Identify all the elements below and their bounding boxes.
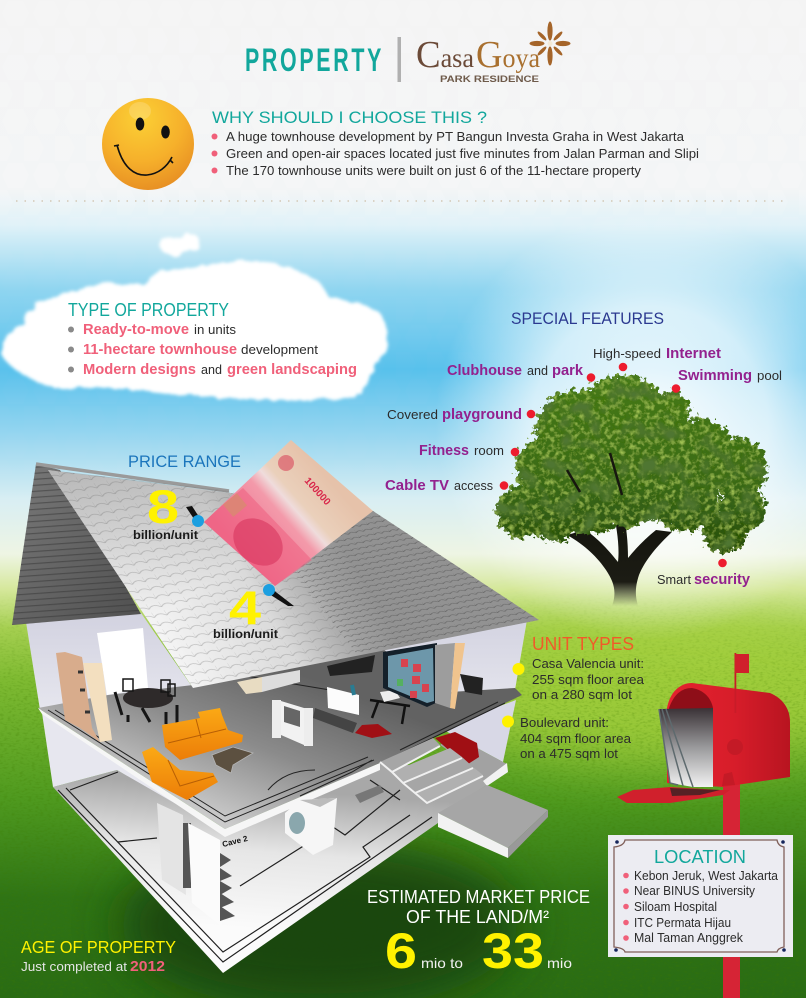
text block: type of property <box>68 300 357 378</box>
label: clubhouse and park: park <box>552 363 584 379</box>
header logo: Property | Casa Goya Park Residence: PROPERTY <box>245 42 384 78</box>
label: clubhouse and park: Clubhouse <box>447 363 522 379</box>
value: 8 billion per unit: billion/unit <box>133 530 198 542</box>
text block: type of property: Modern designs <box>83 361 196 378</box>
text block: type of property: green landscaping <box>227 361 357 378</box>
roof gable left <box>12 464 229 625</box>
text block: type of property: TYPE OF PROPERTY <box>68 300 229 320</box>
door opening <box>97 628 148 695</box>
roof tiles <box>48 470 539 688</box>
panel: unit types: UNIT TYPES <box>532 634 634 654</box>
label: cable tv access <box>385 478 508 494</box>
value: 4 billion per unit <box>213 581 278 641</box>
label: clubhouse and park <box>447 363 595 382</box>
tree foliage <box>496 375 768 553</box>
panel: unit types <box>502 634 645 761</box>
label: covered playground <box>387 407 535 423</box>
label: covered playground: playground <box>442 407 522 423</box>
panel: age of property: AGE OF PROPERTY <box>21 937 176 957</box>
cabinet panel <box>435 643 465 709</box>
label: covered playground: Covered <box>387 407 438 422</box>
connector: 4 billion <box>263 584 294 606</box>
icon: smiley face <box>102 98 194 190</box>
panel: unit types: Casa Valencia unit: <box>532 656 644 671</box>
text block: why should I choose this: WHY SHOULD I CHOOSE THIS ? <box>212 108 487 127</box>
panel: location sign: Siloam Hospital <box>634 899 717 914</box>
dining table and chairs <box>115 679 177 724</box>
panel: location sign: LOCATION <box>654 847 746 867</box>
text block: special features <box>385 309 782 588</box>
orange sofa front <box>142 747 218 800</box>
small red chair <box>355 724 392 738</box>
tree illustration <box>496 375 768 606</box>
panel: unit types: 255 sqm floor area <box>532 672 645 687</box>
text block: type of property: in units <box>194 322 236 337</box>
text block: type of property: and <box>201 362 222 377</box>
icon: logo ornament <box>530 22 570 66</box>
lower left wall <box>42 713 190 812</box>
panel: estimated market price: 33 <box>482 923 544 979</box>
icon: banknote: 100000 <box>302 476 333 508</box>
house cutaway illustration <box>12 464 548 973</box>
icon: banknote <box>204 440 373 586</box>
panel: price range: PRICE RANGE <box>128 452 241 471</box>
panel: unit types: on a 280 sqm lot <box>532 687 632 702</box>
text block: type of property: development <box>241 342 318 357</box>
header logo: Property | Casa Goya Park Residence <box>245 22 570 85</box>
slab edge right <box>483 763 508 786</box>
stairs <box>380 738 483 803</box>
panel: estimated market price: ESTIMATED MARKET PRICE <box>367 887 590 907</box>
white desk <box>327 685 410 724</box>
small cloud <box>160 233 199 255</box>
text block: type of property: Ready-to-move <box>83 321 189 338</box>
header logo: Property | Casa Goya Park Residence: Goya <box>476 34 540 76</box>
coffee table <box>212 747 253 773</box>
panel: unit types: on a 475 sqm lot <box>520 746 618 761</box>
label: smart security: Smart <box>657 572 691 587</box>
panel: age of property <box>21 937 176 975</box>
orange sofa back <box>162 708 243 760</box>
label: smart security <box>657 559 750 588</box>
panel: estimated market price <box>367 887 590 979</box>
label: swimming pool <box>672 368 782 393</box>
panel: location sign: Kebon Jeruk, West Jakarta <box>634 868 779 883</box>
value: 8 billion per unit <box>133 480 198 542</box>
panel: price range <box>128 440 373 641</box>
tree trunk <box>567 500 672 606</box>
panel: estimated market price: 6 <box>385 923 417 979</box>
lower right wall <box>440 700 516 762</box>
text block: type of property: 11-hectare townhouse <box>83 341 237 358</box>
bookcase <box>383 643 438 707</box>
washing machine <box>285 798 337 855</box>
label: fitness room: room <box>474 443 504 458</box>
upper floor slab <box>38 650 522 837</box>
connector: 8 billion <box>186 506 204 527</box>
icon: red mailbox <box>617 653 790 998</box>
label: fitness room: Fitness <box>419 443 469 459</box>
panel: location sign <box>608 835 793 957</box>
label: smart security: security <box>694 572 750 588</box>
value: 4 billion per unit: 4 <box>229 581 261 634</box>
dark floor recess <box>313 708 357 733</box>
red sofa <box>435 732 479 766</box>
big cloud <box>2 260 387 400</box>
storage pillar <box>157 803 235 927</box>
panel: estimated market price: OF THE LAND/M² <box>406 907 549 927</box>
label: clubhouse and park: and <box>527 363 548 378</box>
label: fitness room <box>419 443 519 459</box>
label: cable tv access: access <box>454 478 493 493</box>
label: high-speed internet: Internet <box>666 346 721 362</box>
panel: age of property: Just completed at <box>21 959 127 974</box>
text block: special features: SPECIAL FEATURES <box>511 309 664 328</box>
label: cable tv access: Cable TV <box>385 478 449 494</box>
label: swimming pool: pool <box>757 368 782 383</box>
television unit <box>272 700 313 746</box>
panel: unit types: Boulevard unit: <box>520 715 609 730</box>
text block: why should I choose this: A huge townhouse development by PT Bangun Investa Graha in West Jakarta <box>226 129 685 144</box>
label: swimming pool: Swimming <box>678 368 752 384</box>
panel: estimated market price: mio to <box>421 955 463 971</box>
label: high-speed internet: High-speed <box>593 346 661 361</box>
floor plan label: Cave 2 <box>221 834 249 849</box>
lower floor plan <box>53 763 508 973</box>
panel: location sign: ITC Permata Hijau <box>634 915 731 930</box>
label: high-speed internet <box>593 346 721 371</box>
lower right floor strip <box>440 735 507 785</box>
tree inner branches <box>567 453 622 495</box>
far furniture: tan box and bed <box>237 655 375 694</box>
panel: location sign: Near BINUS University <box>634 883 755 898</box>
panel: unit types: 404 sqm floor area <box>520 731 632 746</box>
upper floor back wall <box>26 613 527 710</box>
text block: why should I choose this: Green and open-air spaces located just five minutes from Jalan Parman and Slipi <box>226 146 699 161</box>
value: 8 billion per unit: 8 <box>147 480 179 533</box>
panel: age of property: 2012 <box>130 959 165 975</box>
panel: estimated market price: mio <box>547 955 572 971</box>
value: 4 billion per unit: billion/unit <box>213 629 278 641</box>
side table <box>460 674 483 695</box>
cabinet <box>56 652 112 742</box>
panel: location sign: Mal Taman Anggrek <box>634 930 743 945</box>
landing platform <box>438 785 548 858</box>
text block: why should I choose this <box>212 108 699 178</box>
header logo: Property | Casa Goya Park Residence: PARK RESIDENCE <box>440 74 539 85</box>
header logo: Property | Casa Goya Park Residence: Casa <box>416 34 474 76</box>
text block: why should I choose this: The 170 townhouse units were built on just 6 of the 11-hectare property <box>226 163 641 178</box>
